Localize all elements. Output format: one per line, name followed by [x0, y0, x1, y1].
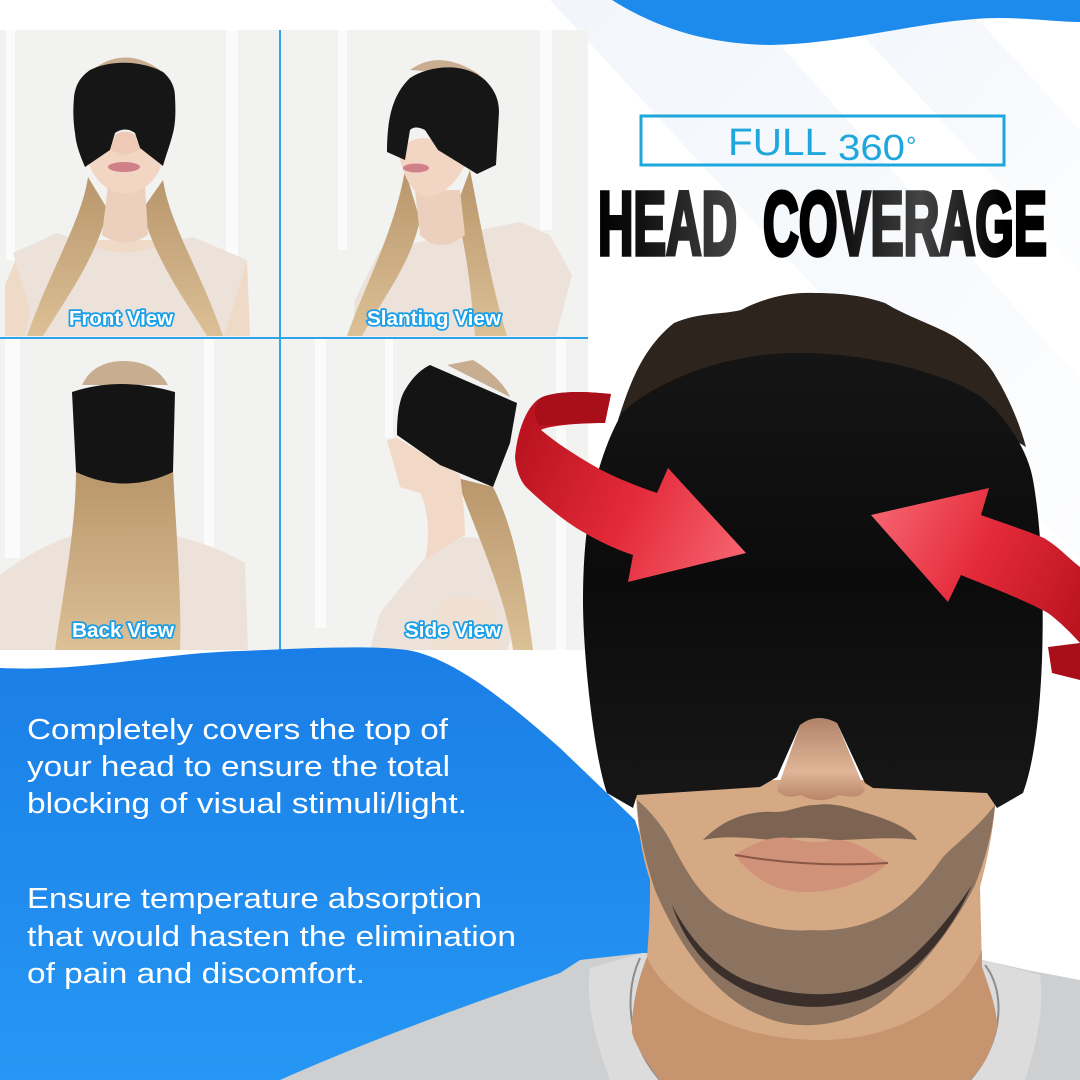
panel: side view — [280, 338, 588, 650]
text block: bottom paragraph: Ensure temperature absorption — [27, 883, 482, 915]
neck and face — [632, 780, 997, 1080]
shirt — [280, 953, 1080, 1080]
background stripes — [550, 0, 1080, 560]
mask — [583, 353, 1043, 808]
heading box: full 360: 360 — [838, 127, 905, 168]
heading box: full 360: FULL — [728, 122, 827, 164]
heading box: full 360 — [641, 116, 1004, 168]
lips — [735, 837, 888, 892]
text block: bottom paragraph: that would hasten the elimination — [27, 921, 516, 953]
beard dark line — [672, 885, 972, 1007]
panel: front view — [0, 30, 280, 338]
moustache — [703, 804, 917, 840]
text block: top paragraph: Completely covers the top of — [27, 714, 449, 746]
arrow: left red — [515, 392, 746, 582]
dividers — [279, 30, 281, 650]
hair — [618, 293, 1026, 447]
text block: bottom paragraph — [27, 883, 516, 990]
bottom blue wave — [0, 647, 680, 1080]
panel: photo grid — [0, 30, 588, 650]
text block: top paragraph: blocking of visual stimuli/light. — [27, 788, 467, 820]
panel: slanting view — [280, 30, 588, 338]
nose — [777, 718, 865, 800]
text block: top paragraph — [27, 714, 467, 820]
labels: Front View — [69, 308, 173, 330]
labels: Back View — [72, 620, 174, 642]
labels: Slanting View — [367, 308, 501, 330]
title — [598, 174, 1047, 274]
top blue wave — [612, 0, 1080, 45]
text block: top paragraph: your head to ensure the total — [27, 751, 450, 783]
labels — [69, 308, 501, 642]
panel: back view — [0, 338, 280, 650]
labels: Side View — [405, 620, 501, 642]
beard — [637, 800, 995, 1025]
title: HEAD — [598, 174, 737, 274]
text block: bottom paragraph: of pain and discomfort. — [27, 958, 365, 990]
heading box: full 360: ° — [906, 131, 916, 161]
man illustration — [280, 293, 1080, 1080]
arrow: right red — [871, 488, 1080, 680]
neck shade — [632, 950, 997, 1080]
